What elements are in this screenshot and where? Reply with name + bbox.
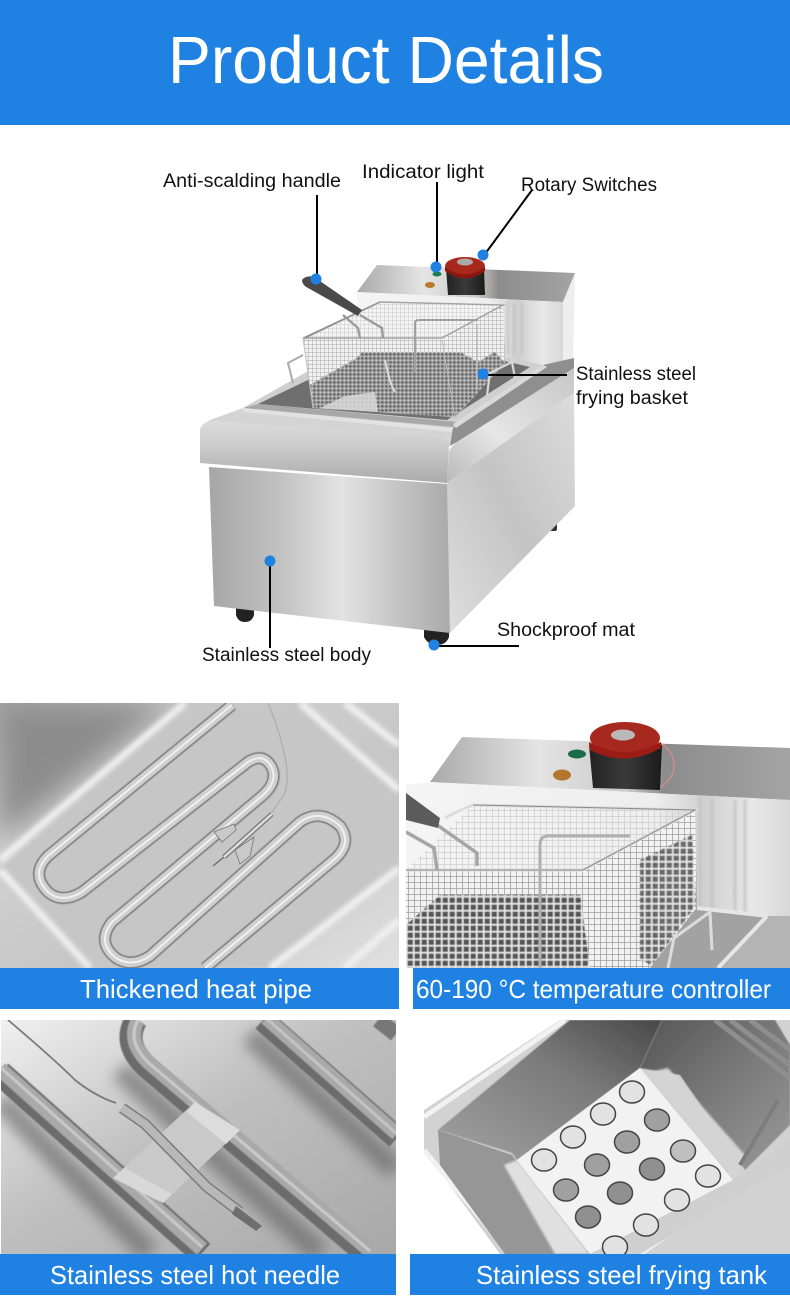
tank rim and interior — [243, 356, 547, 432]
label: rotary switches: Rotary Switches — [521, 175, 657, 196]
panel: thickened heat pipe — [0, 703, 399, 1009]
indicator lights — [425, 272, 442, 288]
label: anti-scalding handle: Anti-scalding handle — [163, 171, 341, 192]
photo: heat pipe — [0, 703, 399, 968]
label: stainless steel body: Stainless steel body — [202, 645, 371, 666]
fryer handle — [302, 276, 383, 338]
back control panel — [357, 265, 575, 366]
counter top — [200, 408, 453, 446]
panel: hot needle — [0, 1018, 397, 1295]
label: shockproof mat: Shockproof mat — [497, 620, 636, 641]
caption bar — [0, 1254, 396, 1295]
counter side band — [447, 368, 574, 483]
callout dots — [264, 250, 488, 650]
fryer illustration — [200, 257, 575, 645]
header banner — [0, 0, 790, 125]
caption bar: Thickened heat pipe — [80, 974, 312, 1004]
panel: temperature controller — [406, 722, 790, 1009]
rotary knob — [445, 257, 492, 295]
caption bar: 60-190 °C temperature controller — [416, 974, 771, 1004]
basket side handles — [288, 355, 303, 383]
photo: needle — [0, 1018, 397, 1254]
title: Product Details — [168, 23, 604, 98]
panel: frying tank — [410, 1020, 790, 1295]
body side — [447, 393, 575, 633]
panel: fryer product diagram — [163, 162, 696, 666]
perforated plate holes — [532, 1081, 720, 1258]
tray and right side — [720, 916, 790, 968]
label: frying basket — [576, 364, 696, 409]
label: frying basket: Stainless steel — [576, 364, 696, 385]
caption bar: Stainless steel frying tank — [476, 1260, 768, 1290]
feet — [236, 518, 557, 645]
caption bar — [410, 1254, 790, 1295]
caption bar: Stainless steel hot needle — [50, 1260, 340, 1290]
caption bar — [0, 968, 399, 1009]
label: frying basket: frying basket — [576, 388, 689, 409]
counter right strip — [450, 358, 574, 446]
photo: tank — [424, 1020, 790, 1258]
frying basket — [288, 302, 515, 417]
label: indicator light: Indicator light — [362, 162, 485, 183]
counter front band — [200, 421, 449, 483]
clips — [114, 1103, 226, 1203]
body front — [209, 467, 450, 633]
photo: controller and basket — [406, 722, 790, 968]
leader lines — [270, 182, 567, 648]
